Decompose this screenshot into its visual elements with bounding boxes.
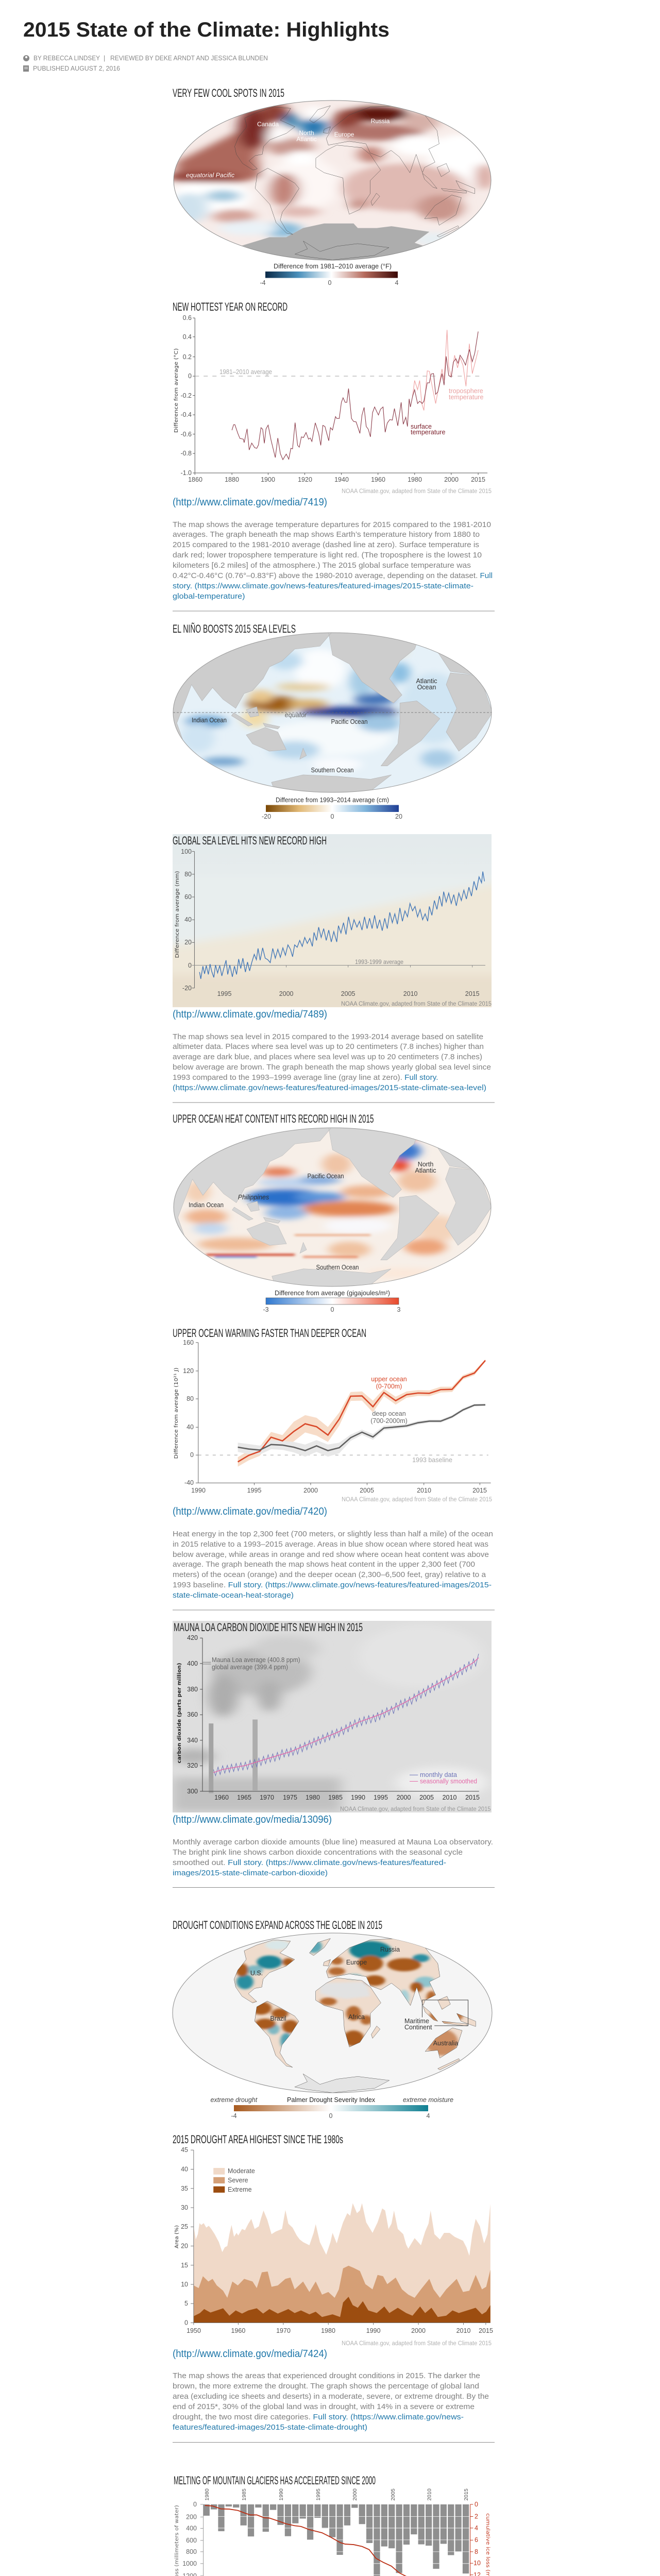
area chart: drought area: 1960 xyxy=(231,2327,245,2334)
map: ocean heat content xyxy=(173,1126,492,1291)
legend: temperature difference: 4 xyxy=(395,279,399,286)
combo chart: glacier ice loss: 1000 xyxy=(182,2560,197,2567)
heading: upper ocean warming: UPPER OCEAN WARMING FASTER THAN DEEPER OCEAN xyxy=(173,1327,366,1340)
background: beach photo xyxy=(173,834,492,1007)
heading: Mauna Loa: MAUNA LOA CARBON DIOXIDE HITS NEW HIGH IN 2015 xyxy=(174,1621,363,1634)
credit: NOAA Climate.gov, adapted from State of the Climate 2015 xyxy=(342,1497,492,1503)
paragraph: temperature: kilometers [6.2 miles] of the atmosphere.) The 2015 global surface temperature was xyxy=(173,561,471,570)
legend: Palmer Drought Severity Index: extreme moisture xyxy=(403,2096,453,2104)
paragraph: sea level: average are dark blue, and places where sea level was up to 20 centimeters (7.8 inches) xyxy=(173,1053,482,1061)
paragraph: drought: area (excluding ice sheets and deserts) in a moderate, severe, or extreme drought. By the xyxy=(173,2392,489,2401)
panel: global sea level chart: 60 xyxy=(184,893,192,901)
panel: global sea level chart xyxy=(173,834,492,1007)
map: ocean heat content: Atlantic xyxy=(415,1167,436,1174)
line chart: ocean warming: 2010 xyxy=(417,1487,431,1494)
panel: Mauna Loa carbon dioxide chart: 2000 xyxy=(397,1794,411,1801)
area chart: drought area: 1980 xyxy=(321,2327,335,2334)
line chart: global temperature: 1940 xyxy=(334,476,349,483)
panel: Mauna Loa carbon dioxide chart: seasonally smoothed xyxy=(420,1777,477,1785)
line chart: global temperature: 0 xyxy=(188,372,192,380)
paragraph: sea level: 1993 compared to the 1993–1999 average line (gray line at zero). Full story. xyxy=(173,1073,438,1082)
line chart: global temperature: 1920 xyxy=(298,476,312,483)
map: sea level anomalies xyxy=(173,631,493,796)
panel: Mauna Loa carbon dioxide chart: 2005 xyxy=(419,1794,434,1801)
map: sea level anomalies: Pacific Ocean xyxy=(331,718,368,725)
line chart: ocean warming: 2000 xyxy=(303,1487,318,1494)
map: drought severity: Russia xyxy=(380,1946,400,1953)
line chart: global temperature: 2015 xyxy=(471,476,485,483)
legend: sea level difference: 20 xyxy=(395,813,402,820)
area chart: drought area: 20 xyxy=(181,2242,188,2249)
line chart: ocean warming xyxy=(174,1339,491,1494)
line chart: ocean warming: 1990 xyxy=(191,1487,206,1494)
map: global temperature anomalies: Canada xyxy=(257,121,279,128)
line chart: ocean warming: deep ocean xyxy=(372,1410,406,1417)
map: global temperature anomalies: Russia xyxy=(371,117,390,125)
area chart: drought area: Extreme xyxy=(228,2186,252,2193)
area chart: drought area: 2010 xyxy=(456,2327,470,2334)
combo chart: glacier ice loss: 600 xyxy=(186,2537,197,2544)
paragraph: sea level: (https://www.climate.gov/news-features/featured-images/2015-state-climate-sea-level) xyxy=(173,1083,486,1092)
paragraph: temperature: global-temperature) xyxy=(173,592,245,601)
heading: mountain glaciers: MELTING OF MOUNTAIN GLACIERS HAS ACCELERATED SINCE 2000 xyxy=(174,2474,376,2487)
paragraph: temperature: 0.42°C-0.46°C (0.76°–0.83°F) above the 1980-2010 average, depending on the dataset. Full xyxy=(173,571,493,580)
paragraph: carbon dioxide: The bright pink line shows carbon dioxide concentrations with the seasonal cycle xyxy=(173,1848,463,1857)
line chart: global temperature: Difference from average (°C) xyxy=(174,348,179,433)
paragraph: ocean heat xyxy=(173,1530,493,1600)
map: drought severity xyxy=(168,1932,505,2100)
line chart: ocean warming: -40 xyxy=(184,1479,194,1486)
line chart: global temperature: 0.6 xyxy=(183,314,192,321)
legend: temperature difference: -4 xyxy=(260,279,266,286)
panel: global sea level chart: 40 xyxy=(184,916,192,923)
link: (http://www.climate.gov/media/7424) xyxy=(173,2348,327,2360)
link: (http://www.climate.gov/media/7420) xyxy=(173,1506,327,1517)
map: sea level anomalies: Ocean xyxy=(417,684,436,691)
legend: temperature difference: 0 xyxy=(328,279,332,286)
heading: global sea level: GLOBAL SEA LEVEL HITS NEW RECORD HIGH xyxy=(173,834,327,847)
paragraph: carbon dioxide: Monthly average carbon dioxide amounts (blue line) measured at Mauna Loa observatory. xyxy=(173,1838,493,1846)
heading: drought conditions: DROUGHT CONDITIONS EXPAND ACROSS THE GLOBE IN 2015 xyxy=(173,1919,382,1931)
combo chart: glacier ice loss: 8 xyxy=(475,2548,478,2555)
area chart: drought area: 35 xyxy=(181,2185,188,2192)
panel: Mauna Loa carbon dioxide chart: 340 xyxy=(187,1737,198,1744)
map: sea level anomalies: equator xyxy=(285,711,307,719)
byline: | xyxy=(104,55,105,62)
line chart: ocean warming: 40 xyxy=(187,1423,194,1431)
area chart: drought area: 15 xyxy=(181,2262,188,2269)
paragraph: ocean heat: below average, while areas in orange and red show where ocean heat content was above xyxy=(173,1550,489,1559)
panel: Mauna Loa carbon dioxide chart: 400 xyxy=(187,1660,198,1667)
legend: temperature difference xyxy=(260,263,399,286)
map: drought severity: Europe xyxy=(346,1959,367,1966)
combo chart: glacier ice loss: 400 xyxy=(186,2524,197,2532)
line chart: global temperature: -1.0 xyxy=(180,469,192,477)
legend: ocean heat difference: -3 xyxy=(263,1306,269,1313)
combo chart: glacier ice loss: 6 xyxy=(475,2536,478,2544)
byline xyxy=(23,55,268,62)
panel: Mauna Loa carbon dioxide chart: 380 xyxy=(187,1686,198,1693)
line chart: global temperature: 0.4 xyxy=(183,333,192,341)
area chart: drought area: 25 xyxy=(181,2223,188,2230)
line chart: ocean warming: 1995 xyxy=(247,1487,261,1494)
paragraph: temperature: 2015 compared to the 1981-2010 average (dashed line at zero). Surface temperature is xyxy=(173,540,479,549)
paragraph: temperature: The map shows the average temperature departures for 2015 compared to the 1981-2010 xyxy=(173,520,491,529)
line chart: ocean warming: (700-2000m) xyxy=(370,1417,408,1425)
panel: global sea level chart: 80 xyxy=(184,871,192,878)
legend: temperature difference: Difference from 1981–2010 average (°F) xyxy=(274,263,392,270)
link: (http://www.climate.gov/media/13096) xyxy=(173,1814,332,1825)
area chart: drought area xyxy=(174,2146,493,2334)
area chart: drought area: 40 xyxy=(181,2166,188,2173)
panel: Mauna Loa carbon dioxide chart: 1965 xyxy=(237,1794,251,1801)
legend: Palmer Drought Severity Index: 0 xyxy=(329,2112,333,2120)
panel: Mauna Loa carbon dioxide chart: 1990 xyxy=(351,1794,365,1801)
paragraph: ocean heat: average. The graph beneath the map shows heat content in the upper 2,300 feet (700 xyxy=(173,1560,475,1569)
panel: Mauna Loa carbon dioxide chart: 1975 xyxy=(283,1794,297,1801)
panel: Mauna Loa carbon dioxide chart: 2015 xyxy=(465,1794,480,1801)
combo chart: glacier ice loss: 2015 xyxy=(464,2488,469,2501)
line chart: global temperature: 1860 xyxy=(188,476,202,483)
area chart: drought area: 10 xyxy=(181,2281,188,2288)
panel: Mauna Loa carbon dioxide chart: 1995 xyxy=(374,1794,388,1801)
panel: Mauna Loa carbon dioxide chart: monthly data xyxy=(420,1771,457,1778)
legend: Palmer Drought Severity Index xyxy=(210,2096,453,2120)
line chart: global temperature: 0.2 xyxy=(183,353,192,361)
heading: drought area: 2015 DROUGHT AREA HIGHEST SINCE THE 1980s xyxy=(173,2133,343,2146)
combo chart: glacier ice loss: 1985 xyxy=(242,2488,247,2501)
panel: Mauna Loa carbon dioxide chart: 1980 xyxy=(306,1794,320,1801)
panel: Mauna Loa carbon dioxide chart xyxy=(173,1621,492,1812)
line chart: global temperature: 1880 xyxy=(225,476,239,483)
link: (http://www.climate.gov/media/7419) xyxy=(173,497,327,508)
map: global temperature anomalies: equatorial Pacific xyxy=(186,172,234,179)
paragraph: drought: drought, the two most dire categories. Full story. (https://www.climate.gov/news- xyxy=(173,2413,464,2421)
legend: Palmer Drought Severity Index: Palmer Drought Severity Index xyxy=(287,2096,375,2104)
byline: REVIEWED BY DEKE ARNDT AND JESSICA BLUNDEN xyxy=(110,55,268,62)
paragraph: ocean heat: 1993 baseline. Full story. (https://www.climate.gov/news-features/featured-images/2015- xyxy=(173,1581,492,1589)
legend: ocean heat difference: Difference from average (gigajoules/m²) xyxy=(275,1290,390,1297)
credit: NOAA Climate.gov, adapted from State of the Climate 2015 xyxy=(342,488,492,495)
line chart: global temperature: temperature xyxy=(411,429,445,436)
area chart: drought area: 1970 xyxy=(276,2327,291,2334)
combo chart: glacier ice loss: 1990 xyxy=(279,2488,284,2501)
legend: sea level difference: 0 xyxy=(331,813,334,820)
combo chart: glacier ice loss: 10 xyxy=(473,2560,481,2567)
combo chart: glacier ice loss: 2005 xyxy=(391,2488,396,2501)
combo chart: glacier ice loss: 0 xyxy=(475,2501,478,2508)
legend: Palmer Drought Severity Index: extreme drought xyxy=(210,2096,258,2104)
legend: ocean heat difference: 0 xyxy=(331,1306,334,1313)
paragraph: sea level: below average are brown. The graph beneath the map shows yearly global sea level since xyxy=(173,1063,491,1072)
area chart: drought area: Severe xyxy=(228,2177,248,2184)
panel: Mauna Loa carbon dioxide chart: global average (399.4 ppm) xyxy=(212,1664,288,1671)
area chart: drought area: 5 xyxy=(184,2300,188,2307)
panel: global sea level chart: 100 xyxy=(181,848,192,855)
heading: El Nino sea levels: EL NIÑO BOOSTS 2015 SEA LEVELS xyxy=(173,622,296,635)
line chart: global temperature: troposphere xyxy=(449,387,483,395)
line chart: global temperature: -0.4 xyxy=(180,411,192,418)
combo chart: glacier ice loss: 1995 xyxy=(316,2488,321,2501)
combo chart: glacier ice loss: 800 xyxy=(186,2548,197,2555)
page header xyxy=(23,19,390,72)
area chart: drought area: 30 xyxy=(181,2204,188,2211)
paragraph: temperature xyxy=(173,520,493,601)
line chart: ocean warming: 2015 xyxy=(472,1487,487,1494)
map: drought severity: Maritime xyxy=(404,2018,429,2025)
line chart: global temperature: 1980 xyxy=(408,476,422,483)
map: global temperature anomalies: North xyxy=(299,129,314,137)
map: sea level anomalies: Atlantic xyxy=(416,677,437,685)
paragraph: carbon dioxide xyxy=(173,1838,493,1877)
paragraph: sea level xyxy=(173,1032,491,1092)
area chart: drought area: 2015 xyxy=(479,2327,493,2334)
map: ocean heat content: Philippines xyxy=(238,1194,269,1201)
legend: Palmer Drought Severity Index: -4 xyxy=(231,2112,237,2120)
panel: Mauna Loa carbon dioxide chart: NOAA Climate.gov, adapted from State of the Climate 2015 xyxy=(340,1806,490,1812)
paragraph: temperature: averages. The graph beneath the map shows Earth’s temperature history from 1880 to xyxy=(173,530,480,539)
map: global temperature anomalies: Atlantic xyxy=(296,135,317,143)
line chart: global temperature: 1981–2010 average xyxy=(219,368,272,376)
byline: BY REBECCA LINDSEY xyxy=(33,55,100,62)
line chart: global temperature: 1900 xyxy=(261,476,275,483)
panel: global sea level chart: 2000 xyxy=(279,990,294,997)
line chart: global temperature: -0.2 xyxy=(180,392,192,399)
map: ocean heat content: Southern Ocean xyxy=(316,1264,359,1271)
map: drought severity: Brazil xyxy=(270,2015,286,2022)
area chart: drought area: 0 xyxy=(184,2319,188,2327)
line chart: global temperature: temperature xyxy=(449,394,483,401)
line chart: global temperature: -0.8 xyxy=(180,450,192,457)
line chart: ocean warming: 1993 baseline xyxy=(412,1456,452,1464)
legend: sea level difference: Difference from 1993–2014 average (cm) xyxy=(276,796,389,804)
paragraph: ocean heat: meters) of the ocean (orange) and the deeper ocean (2,300–6,500 feet, gray) relative to a xyxy=(173,1570,486,1579)
paragraph: drought xyxy=(173,2371,489,2432)
map: drought severity: Africa xyxy=(348,2013,365,2021)
line chart: global temperature xyxy=(174,314,487,483)
paragraph: ocean heat: in 2015 relative to a 1993–2015 average. Areas in blue show ocean where stored heat was xyxy=(173,1540,488,1549)
line chart: ocean warming: 160 xyxy=(183,1339,194,1346)
map: drought severity: Australia xyxy=(433,2040,458,2047)
line chart: ocean warming: 0 xyxy=(190,1451,194,1459)
panel: global sea level chart: 1993-1999 average xyxy=(355,958,403,965)
map: ocean heat content: Pacific Ocean xyxy=(307,1173,344,1180)
panel: global sea level chart: 2015 xyxy=(465,990,480,997)
combo chart: glacier ice loss: 0 xyxy=(193,2501,197,2508)
line chart: ocean warming: 2005 xyxy=(360,1487,374,1494)
panel: global sea level chart: 2010 xyxy=(403,990,418,997)
legend: ocean heat difference: 3 xyxy=(397,1306,401,1313)
paragraph: sea level: altimeter data. Places where sea level was up to 20 centimeters (7.8 inches) higher than xyxy=(173,1042,484,1051)
combo chart: glacier ice loss: 2 xyxy=(475,2513,478,2520)
panel: global sea level chart: Difference from average (mm) xyxy=(175,871,180,958)
publication date: PUBLISHED AUGUST 2, 2016 xyxy=(33,65,120,72)
area chart: drought area: 45 xyxy=(181,2146,188,2154)
credit: NOAA Climate.gov, adapted from State of the Climate 2015 xyxy=(342,2341,492,2347)
paragraph: carbon dioxide: images/2015-state-climate-carbon-dioxide) xyxy=(173,1869,328,1877)
panel: Mauna Loa carbon dioxide chart: 2010 xyxy=(443,1794,456,1801)
combo chart: glacier ice loss: 1980 xyxy=(205,2488,210,2501)
panel: global sea level chart: 2005 xyxy=(341,990,356,997)
area chart: drought area: 1990 xyxy=(366,2327,381,2334)
paragraph: ocean heat: Heat energy in the top 2,300 feet (700 meters, or slightly less than half a mile) of the ocean xyxy=(173,1530,493,1538)
background: smokestacks photo xyxy=(173,1621,492,1812)
panel: Mauna Loa carbon dioxide chart: carbon dioxide (parts per million) xyxy=(177,1663,182,1763)
paragraph: drought: end of 2015*, 30% of the global land was in drought, with 14% in a severe or extreme xyxy=(173,2402,475,2411)
title: 2015 State of the Climate: Highlights xyxy=(23,19,390,41)
paragraph: ocean heat: state-climate-ocean-heat-storage) xyxy=(173,1591,294,1600)
area chart: drought area: 1950 xyxy=(187,2327,201,2334)
panel: Mauna Loa carbon dioxide chart: 1970 xyxy=(260,1794,274,1801)
panel: Mauna Loa carbon dioxide chart: 360 xyxy=(187,1711,198,1718)
paragraph: drought: The map shows the areas that experienced drought conditions in 2015. The darker the xyxy=(173,2371,480,2380)
paragraph: temperature: dark red; lower troposphere temperature is light red. (The troposphere is the lowest 10 xyxy=(173,551,482,560)
panel: Mauna Loa carbon dioxide chart: Mauna Loa average (400.8 ppm) xyxy=(212,1656,300,1664)
line chart: ocean warming: upper ocean xyxy=(371,1376,407,1383)
map: drought severity: U.S. xyxy=(250,1970,263,1977)
paragraph: temperature: story. (https://www.climate.gov/news-features/featured-images/2015-state-climate- xyxy=(173,582,473,590)
paragraph: sea level: The map shows sea level in 2015 compared to the 1993-2014 average based on satellite xyxy=(173,1032,483,1041)
line chart: global temperature: surface xyxy=(411,423,432,430)
line chart: ocean warming: Difference from average (10²¹ J) xyxy=(174,1367,179,1459)
combo chart: glacier ice loss xyxy=(174,2488,490,2576)
heading: new hottest year: NEW HOTTEST YEAR ON RECORD xyxy=(173,300,287,313)
map: sea level anomalies: Southern Ocean xyxy=(311,767,354,774)
area chart: drought area: 2000 xyxy=(411,2327,426,2334)
combo chart: glacier ice loss: 4 xyxy=(475,2524,478,2532)
legend: sea level difference: -20 xyxy=(262,813,271,820)
map: global temperature anomalies: Europe xyxy=(334,131,354,138)
panel: global sea level chart: 20 xyxy=(184,939,192,946)
panel: Mauna Loa carbon dioxide chart: 300 xyxy=(187,1788,198,1795)
heading: very few cool spots: VERY FEW COOL SPOTS IN 2015 xyxy=(173,87,284,99)
legend: Palmer Drought Severity Index: 4 xyxy=(427,2112,430,2120)
combo chart: glacier ice loss: 2000 xyxy=(352,2488,358,2501)
legend: sea level difference xyxy=(262,796,402,820)
panel: Mauna Loa carbon dioxide chart: 1960 xyxy=(214,1794,229,1801)
line chart: global temperature: 2000 xyxy=(444,476,459,483)
map: ocean heat content: Indian Ocean xyxy=(189,1201,224,1209)
combo chart: glacier ice loss: 2010 xyxy=(427,2488,433,2501)
link: (http://www.climate.gov/media/7489) xyxy=(173,1009,327,1020)
map: global temperature anomalies xyxy=(166,98,493,263)
panel: Mauna Loa carbon dioxide chart: 1985 xyxy=(328,1794,343,1801)
panel: global sea level chart: 0 xyxy=(188,962,192,969)
area chart: drought area: Area (%) xyxy=(174,2225,180,2248)
paragraph: carbon dioxide: smoothed out. Full story. (https://www.climate.gov/news-features/featured- xyxy=(173,1858,446,1867)
panel: global sea level chart: -20 xyxy=(182,985,192,992)
line chart: global temperature: -0.6 xyxy=(180,431,192,438)
map: ocean heat content: North xyxy=(418,1161,433,1168)
paragraph: drought: brown, the more extreme the drought. The graph shows the percentage of global land xyxy=(173,2382,479,2391)
heading: upper ocean heat content: UPPER OCEAN HEAT CONTENT HITS RECORD HIGH IN 2015 xyxy=(173,1112,374,1125)
line chart: ocean warming: (0-700m) xyxy=(376,1383,402,1390)
line chart: ocean warming: 120 xyxy=(183,1367,194,1375)
map: drought severity: Continent xyxy=(404,2024,432,2031)
line chart: global temperature: 1960 xyxy=(371,476,385,483)
paragraph: drought: features/featured-images/2015-state-climate-drought) xyxy=(173,2423,367,2432)
panel: global sea level chart: NOAA Climate.gov, adapted from State of the Climate 2015 xyxy=(341,1001,492,1007)
area chart: drought area: Moderate xyxy=(228,2167,255,2175)
panel: global sea level chart: 1995 xyxy=(217,990,231,997)
map: sea level anomalies: Indian Ocean xyxy=(192,717,227,724)
legend: ocean heat difference xyxy=(263,1290,401,1313)
panel: Mauna Loa carbon dioxide chart: 320 xyxy=(187,1762,198,1769)
combo chart: glacier ice loss: 200 xyxy=(186,2513,197,2520)
line chart: ocean warming: 80 xyxy=(187,1395,194,1402)
panel: Mauna Loa carbon dioxide chart: 420 xyxy=(187,1634,198,1641)
